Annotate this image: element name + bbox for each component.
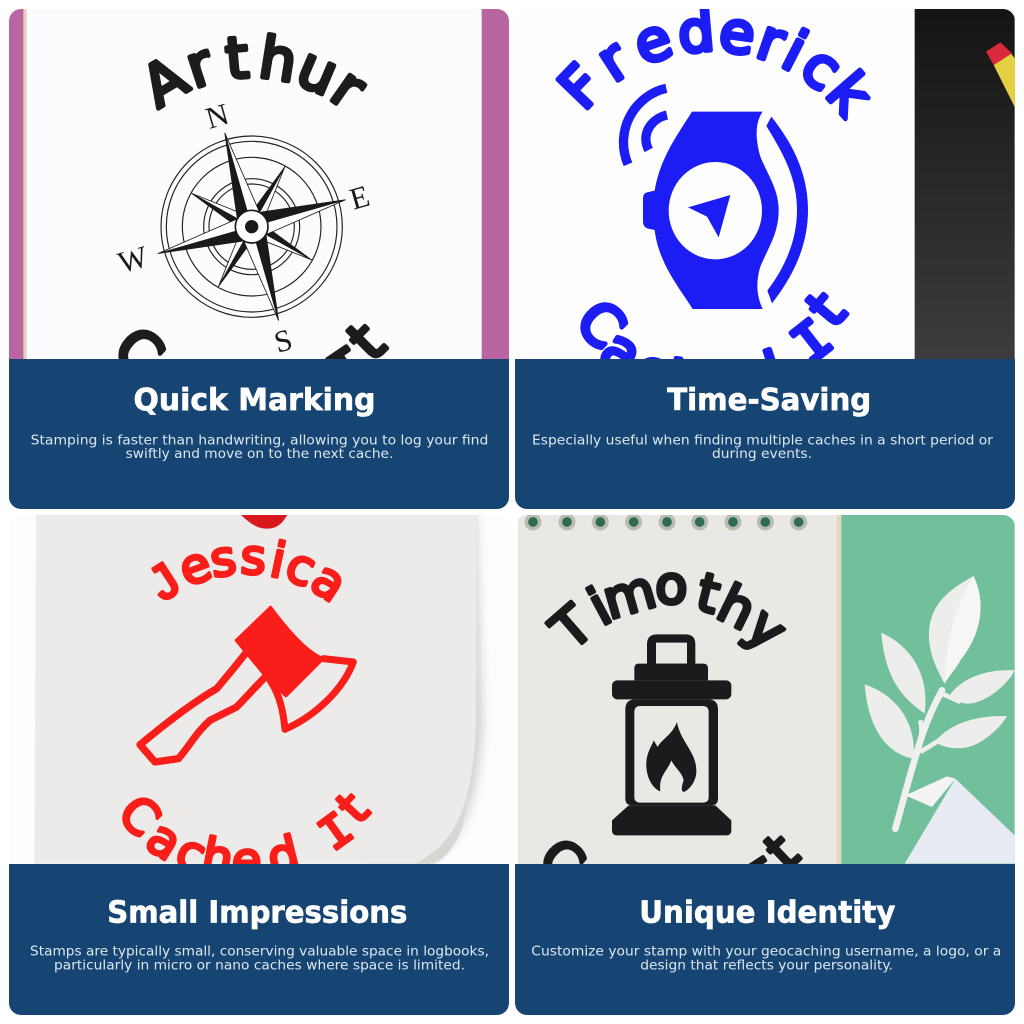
stamp slogan: Cached It: [122, 793, 372, 864]
stamp name: Jessica: s: [239, 529, 267, 586]
panel: Small Impressions: [9, 515, 509, 1015]
stamp slogan: Cached It: t: [326, 782, 380, 834]
stamp slogan: Cached It: t: [754, 823, 811, 881]
stamp slogan: Cached It: h: [662, 348, 708, 419]
stamp slogan: Cached It: C: [107, 785, 171, 848]
icon: lantern: [612, 634, 731, 835]
caption bar: [515, 359, 1015, 509]
caption bar: [9, 864, 509, 1015]
stamp slogan: Cached It: d: [262, 826, 305, 887]
description: swiftly and move on to the next cache.: [126, 446, 393, 462]
icon: axe: [140, 607, 353, 762]
icon: compass rose: [114, 97, 373, 360]
photo: Frederick watch stamp: [556, 9, 1015, 359]
stamp name: Jessica: a: [301, 550, 357, 614]
caption bar: [9, 359, 509, 509]
stamp name: Timothy: o: [655, 556, 687, 617]
heading: Time-Saving: [667, 383, 871, 418]
stamp slogan: Cached It: t: [335, 310, 398, 373]
stamp slogan: Cached It: c: [625, 335, 678, 408]
description: [32, 434, 488, 461]
stamp name: Jessica: i: [266, 532, 290, 590]
panel: Unique Identity: [515, 515, 1015, 1015]
stamp name: Frederick: i: [772, 18, 816, 84]
stamp name: Timothy: T: [539, 594, 605, 662]
heading: Small Impressions: [107, 896, 407, 931]
stamp name: Timothy: [544, 572, 786, 650]
panel: Quick Marking: [9, 9, 509, 509]
stamp name: Jessica: J: [140, 553, 189, 611]
icon: compass rose: E: [346, 179, 373, 217]
stamp name: Jessica: e: [171, 535, 219, 598]
stamp name: Arthur: t: [223, 24, 251, 93]
stamp name: Frederick: r: [749, 7, 794, 77]
stamp slogan: Cached It: t: [794, 280, 859, 339]
stamp name: Arthur: u: [288, 33, 347, 109]
stamp slogan: Cached It: C: [528, 827, 595, 897]
icon: compass rose: S: [270, 322, 296, 360]
description: Customize your stamp with your geocaching username, a logo, or a: [531, 944, 1001, 960]
stamp slogan: Cached It: C: [101, 314, 176, 390]
stamp slogan: Cached It: I: [317, 336, 382, 409]
heading: Quick Marking: [134, 383, 376, 418]
stamp slogan: Cached It: [580, 292, 850, 359]
stamp slogan: Cached It: I: [309, 803, 365, 864]
stamp name: Timothy: y: [735, 596, 798, 662]
stamp name: Frederick: r: [585, 27, 641, 95]
notebook spiral: [526, 515, 805, 529]
stamp name: Jessica: c: [278, 537, 323, 599]
description: Stamping is faster than handwriting, allowing you to log your find: [31, 432, 488, 448]
stamp slogan: Cached It: c: [168, 823, 213, 885]
stamp name: Frederick: c: [789, 33, 854, 104]
stamp slogan: Cached It: [543, 835, 803, 864]
stamp name: Frederick: e: [715, 0, 759, 69]
stamp slogan: Cached It: [118, 324, 390, 359]
stamp name: Jessica: [151, 538, 342, 603]
stamp slogan: Cached It: a: [137, 809, 192, 872]
description: [30, 944, 489, 973]
caption bar: [515, 864, 1015, 1015]
description: particularly in micro or nano caches where space is limited.: [54, 957, 465, 973]
stamp name: Frederick: F: [546, 52, 616, 122]
stamp name: Timothy: m: [596, 559, 662, 632]
stamp name: Timothy: i: [579, 577, 621, 638]
icon: GPS watch: [623, 88, 808, 309]
stamp name: Timothy: t: [691, 562, 726, 626]
description: during events.: [712, 446, 812, 462]
stamp slogan: Cached It: C: [563, 287, 638, 362]
stamp slogan: Cached It: I: [736, 846, 795, 914]
heading: Unique Identity: [639, 896, 896, 931]
stamp name: Frederick: [556, 9, 871, 122]
stamp name: Arthur: A: [131, 43, 199, 121]
stamp name: Timothy: h: [708, 573, 765, 643]
panel: Time-Saving: [515, 0, 1015, 509]
illustration: paper leaves: [865, 576, 1015, 829]
icon: red pin: [241, 515, 287, 529]
stamp name: Jessica: s: [206, 530, 240, 589]
description: [531, 944, 1001, 973]
photo: Timothy lantern stamp: [518, 515, 1015, 864]
photo: Arthur compass stamp: [9, 9, 509, 359]
stamp name: Arthur: r: [320, 54, 378, 123]
stamp slogan: Cached It: I: [781, 308, 847, 380]
icon: pencil: [986, 42, 1015, 108]
stamp slogan: Cached It: a: [589, 315, 654, 390]
description: [533, 434, 993, 461]
sticky note: [34, 515, 477, 864]
stamp name: Arthur: [148, 32, 368, 111]
icon: compass rose: W: [114, 239, 152, 280]
photo: Jessica axe stamp: [34, 515, 488, 864]
stamp name: Frederick: e: [626, 5, 680, 78]
stamp name: Arthur: r: [178, 30, 221, 102]
icon: compass rose: N: [202, 97, 233, 136]
description: Especially useful when finding multiple caches in a short period or: [532, 432, 993, 448]
stamp slogan: Cached It: h: [197, 828, 238, 889]
stamp name: Arthur: h: [255, 24, 301, 96]
illustration: origami paper: [905, 776, 1015, 864]
sticky note shadow: [367, 515, 483, 869]
description: Stamps are typically small, conserving valuable space in logbooks,: [30, 944, 489, 960]
stamp slogan: Cached It: d: [738, 339, 792, 413]
stamp slogan: Cached It: e: [232, 833, 262, 889]
description: design that reflects your personality.: [640, 957, 893, 973]
stamp slogan: Cached It: e: [705, 355, 744, 423]
stamp name: Frederick: k: [813, 60, 885, 128]
